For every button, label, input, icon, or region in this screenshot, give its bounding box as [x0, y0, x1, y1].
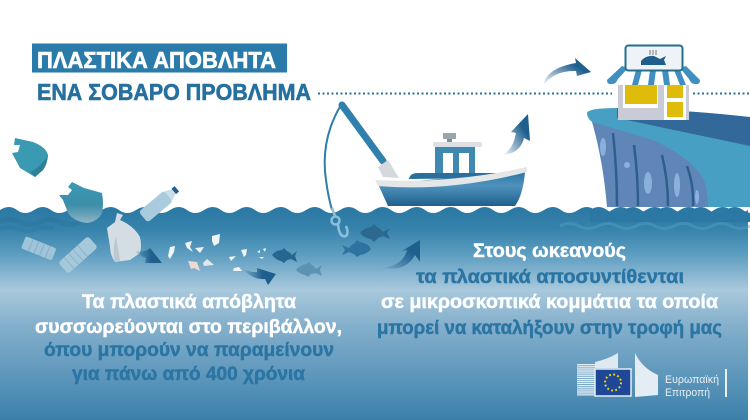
right line 2: τα πλαστικά αποσυντίθενται [416, 266, 684, 288]
sign fish [641, 56, 666, 65]
icon: flying plastic bag [12, 138, 48, 177]
text block: left [35, 291, 342, 385]
awning [613, 68, 696, 85]
EU flag [595, 369, 631, 396]
logo wordmark: Ευρωπαϊκή [665, 374, 719, 386]
boat deck [409, 173, 510, 179]
logo: European Commission [586, 353, 727, 399]
left line 3: όπου μπορούν να παραμείνουν [44, 339, 334, 361]
icon: floating bottle [139, 183, 181, 223]
arrow: boat to market [502, 114, 530, 155]
icon: dock hull [587, 108, 750, 207]
boat hull [378, 172, 525, 206]
icon: fishing boat [342, 105, 527, 206]
hull portholes [600, 138, 606, 156]
title line 2: ΕΝΑ ΣΟΒΑΡΟ ΠΡΟΒΛΗΜΑ [37, 79, 311, 105]
boat rail [375, 167, 527, 187]
arrow: sea to boat [381, 240, 420, 269]
text block: right [377, 240, 722, 339]
logo building right [635, 353, 658, 397]
cabin [435, 146, 475, 175]
hull side [592, 122, 708, 207]
door [664, 85, 686, 120]
dotted line [318, 92, 750, 94]
icon: fishing hook and line [325, 105, 348, 236]
icon: fish under boat right [360, 224, 390, 242]
arrow: bag to fragments [135, 248, 162, 263]
logo: European Commission: Επιτροπή [665, 387, 710, 399]
sign board [626, 46, 682, 70]
icon: fish pale [296, 262, 322, 277]
icon: white plastic bag [107, 213, 141, 262]
rod handle [378, 160, 399, 178]
title [32, 44, 311, 105]
icon: fish dark [272, 248, 297, 263]
sea background [0, 207, 748, 420]
logo divider [725, 369, 727, 397]
arrow: up to shop [543, 58, 591, 86]
icon: sunken bottle middle [58, 236, 98, 274]
sea overlay waves at dock [560, 207, 750, 228]
right line 4: μπορεί να καταλήξουν στην τροφή μας [377, 317, 722, 339]
arrow: fragments to fish [242, 268, 276, 285]
logo building left [577, 364, 595, 396]
shop wall [618, 85, 689, 120]
light deck band [587, 108, 750, 207]
icon: fish under boat left [342, 240, 371, 257]
left line 1: Τα πλαστικά απόβλητα [82, 291, 296, 313]
plastic fragments [168, 234, 266, 271]
flag stars [605, 374, 621, 390]
left line 2: συσσωρεύονται στο περιβάλλον, [35, 316, 342, 338]
fishing rod [342, 105, 383, 161]
icon: fish shop [607, 46, 700, 120]
icon: sunken bottle left [21, 236, 56, 261]
dark deck surface [617, 108, 750, 146]
right line 1: Στους ωκεανούς [473, 240, 626, 262]
right line 3: σε μικροσκοπικά κομμάτια τα οποία [381, 291, 718, 313]
logo building left upper [595, 353, 618, 368]
title line 1: ΠΛΑΣΤΙΚΑ ΑΠΟΒΛΗΤΑ [37, 47, 276, 73]
icon: floating plastic bag [59, 182, 103, 223]
window [623, 85, 658, 108]
left line 4: για πάνω από 400 χρόνια [72, 363, 305, 385]
title highlight box [32, 44, 287, 72]
hull ribs [613, 133, 693, 206]
